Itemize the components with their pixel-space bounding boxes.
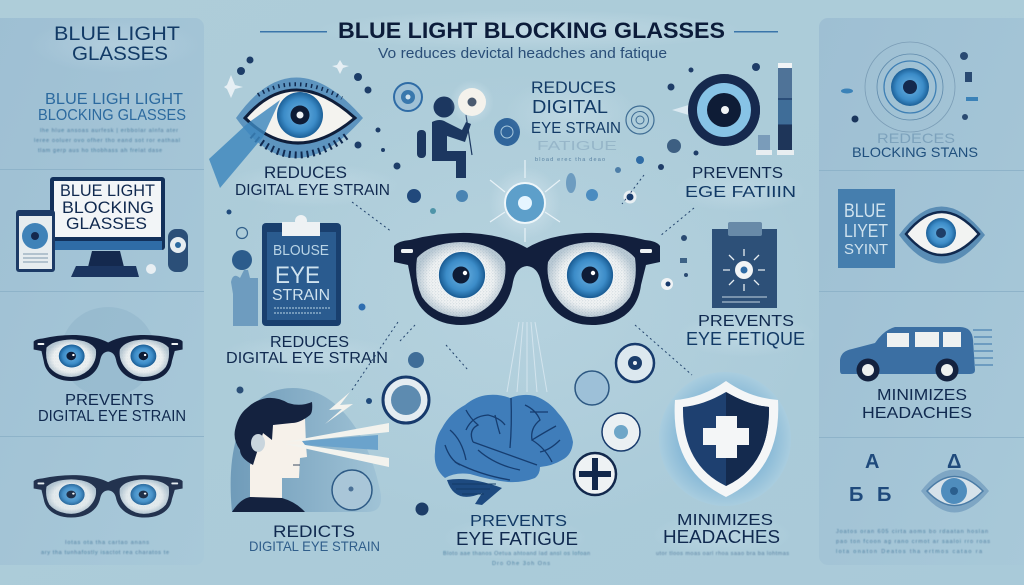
title: [260, 10, 778, 50]
left panel sub heading: BLUE LIGH LIGHT: [45, 91, 183, 108]
monitor label: BLUE LIGHT: [60, 181, 155, 200]
left panel footer text: [41, 540, 169, 556]
caption: reduces digital eye strain centre: FATIGUE: [537, 138, 617, 153]
caption: blocking stans: BLOCKING STANS: [852, 144, 978, 160]
left panel body text: tlam gerp aus ho thobhass ah frelat dase: [38, 148, 162, 154]
caption: redicts digital eye strain: [249, 522, 380, 554]
left panel heading: [30, 17, 200, 73]
caption: reduces digital eye strain centre: [505, 78, 635, 163]
small text under shield: utor tloos moas oarl rhoa saao bra ba lohtmas: [656, 551, 789, 557]
caption: reduces digital eye strain middle: REDUCES: [270, 334, 349, 351]
icon: person at chair: [417, 96, 472, 178]
caption: prevents eye fatigue: EYE FATIGUE: [456, 529, 578, 549]
title: BLUE LIGHT BLOCKING GLASSES: [338, 18, 725, 43]
icon: eye disc left: [394, 83, 422, 111]
blue label box: LIYET: [844, 221, 888, 241]
left panel body text: lhe hlue ansoas aurfesk | erbbolar alnfa ater: [40, 128, 178, 134]
caption: reduces digital eye strain top: DIGITAL EYE STRAIN: [235, 182, 390, 199]
caption: reduces digital eye strain top: REDUCES: [264, 163, 347, 182]
panel: left column: [0, 17, 204, 565]
caption: prevents eye fetique: PREVENTS: [698, 313, 794, 330]
decorative stars around eye: [224, 56, 400, 170]
caption: reduces digital eye strain middle: [218, 334, 398, 375]
icon: light burst: [450, 80, 494, 124]
icon: glasses lower: [34, 475, 183, 518]
small text under brain: [443, 551, 590, 567]
dashed connector lines: [352, 175, 694, 390]
small text under brain: Bloto aae thanos Oetua ahtoand lad ansl os lofoan: [443, 551, 590, 557]
letter icons: Б: [877, 484, 891, 506]
caption: prevents digital eye strain: DIGITAL EYE STRAIN: [38, 408, 186, 425]
icon: eye lower: [921, 470, 989, 512]
monitor label: GLASSES: [66, 214, 147, 233]
letter icons: Δ: [947, 451, 961, 473]
icon: bar column: [756, 63, 794, 155]
icon: plus circle: [574, 453, 616, 495]
icon: central glowing eye: [407, 160, 636, 242]
panel: right column: [819, 18, 1024, 565]
icon: big eye with blue light strip: [209, 78, 363, 188]
caption: redicts digital eye strain: REDICTS: [273, 522, 355, 541]
icon: hand: [231, 270, 258, 326]
left panel heading: GLASSES: [72, 44, 168, 65]
left panel body text: [34, 128, 180, 154]
caption: minimizes headaches: HEADACHES: [862, 405, 972, 422]
caption: minimizes headaches: [652, 512, 792, 557]
caption: minimizes headaches: HEADACHES: [663, 527, 780, 547]
icon: clipboard with eye strain text: STRAIN: [272, 287, 330, 304]
letter icons: [849, 451, 961, 506]
decorative dots top right: [615, 63, 760, 173]
left panel sub heading: BLOCKING GLASSES: [38, 107, 186, 124]
caption: prevents eye fetique: EYE FETIQUE: [686, 329, 805, 349]
right panel footer text: [836, 529, 990, 555]
illustration: man with eye beams: [231, 386, 389, 512]
caption: reduces digital eye strain centre: bload erec tha deao: [535, 157, 605, 163]
caption: reduces digital eye strain centre: EYE STRAIN: [531, 120, 621, 137]
icon: large target eye: [672, 74, 760, 146]
caption: minimizes headaches: MINIMIZES: [877, 387, 967, 404]
icon: swirl target: [626, 106, 654, 134]
caption: prevents eye fatigue: [443, 513, 587, 560]
icon: desktop monitor: [50, 177, 165, 277]
rays below glasses: [507, 322, 547, 392]
icon: car: [840, 327, 993, 382]
monitor label: [60, 181, 155, 233]
blue label box: [838, 189, 895, 268]
caption: reduces digital eye strain top: [224, 163, 400, 207]
left panel footer text: Iotas ota tha cartao anans: [65, 540, 149, 546]
icon: clipboard with eye strain text: [262, 215, 341, 326]
monitor label: BLOCKING: [62, 198, 154, 217]
right panel footer text: Joatos oran 605 cirta aoms bo rdaatan hoslan: [836, 529, 988, 535]
icon: glasses with halo: [34, 307, 183, 397]
caption: prevents ege fatiiin: EGE FATIIIN: [685, 184, 796, 201]
blue label box: SYINT: [844, 241, 888, 258]
left panel heading: BLUE LIGHT: [54, 24, 180, 45]
icon: blue coin: [494, 118, 520, 146]
caption: reduces digital eye strain centre: REDUCES: [531, 78, 616, 97]
caption: reduces digital eye strain middle: DIGITAL EYE STRAIN: [226, 350, 388, 367]
icon: right clipboard: [661, 222, 777, 308]
letter icons: A: [865, 451, 879, 473]
icon: eye: [899, 206, 985, 264]
caption: redicts digital eye strain: DIGITAL EYE STRAIN: [249, 538, 380, 554]
left panel body text: leree ooluer ovo ofher tho eand sot ror eathaal: [34, 138, 180, 144]
left panel footer text: ary tha tunhafostly isactot rea charatos te: [41, 550, 169, 556]
caption: prevents ege fatiiin: [675, 165, 805, 212]
caption: prevents eye fatigue: PREVENTS: [470, 513, 567, 530]
icons: circles around brain: [383, 344, 654, 516]
caption: prevents digital eye strain: PREVENTS: [65, 392, 154, 409]
icon: clipboard with eye strain text: BLOUSE: [273, 242, 329, 259]
caption: minimizes headaches: [862, 387, 972, 422]
caption: blocking stans: REDECES: [877, 130, 955, 146]
caption: prevents eye fetique: [676, 313, 816, 357]
icon: tablet: [16, 210, 55, 272]
icon: concentric eye target: [841, 42, 978, 132]
caption: minimizes headaches: MINIMIZES: [677, 512, 773, 529]
blue label box: BLUE: [844, 201, 886, 222]
left panel sub heading: [38, 91, 186, 124]
right panel footer text: pao ton fcoon ag rano crmot ar saaloi rro roas: [836, 539, 990, 545]
caption: reduces digital eye strain centre: DIGITAL: [532, 97, 608, 117]
illustration: brain: [435, 395, 573, 505]
letter icons: Б: [849, 484, 863, 506]
subtitle: Vo reduces devictal headches and fatique: [378, 45, 667, 62]
icon: speaker: [146, 229, 188, 274]
caption: prevents digital eye strain: [38, 392, 186, 425]
caption: prevents ege fatiiin: PREVENTS: [692, 165, 783, 182]
caption: blocking stans: [852, 130, 978, 160]
small text under brain: Dro Ohe 3oh Ons: [492, 561, 550, 567]
right panel footer text: lota onaton Deatos tha ertmos catao ra: [836, 549, 983, 555]
illustration: shield with cross: [659, 372, 791, 506]
icon: clipboard with eye strain text: EYE: [275, 262, 320, 289]
illustration: main glasses with eyes: [394, 233, 660, 325]
small icons beside clipboard: [226, 210, 366, 310]
